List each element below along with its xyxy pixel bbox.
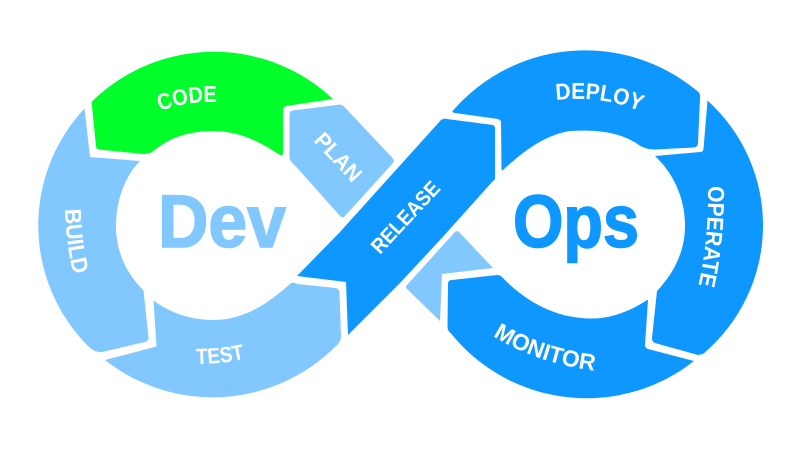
segment: plan [290, 105, 394, 217]
code arrow shape [92, 52, 333, 155]
release label: RELEASE [367, 177, 445, 258]
segment: release [297, 119, 495, 335]
segment: code [92, 52, 333, 156]
build label: BUILD [64, 210, 88, 272]
plan arrow shape [290, 105, 394, 217]
code label: CODE [158, 86, 216, 110]
arrow: monitor to release connector [406, 231, 493, 321]
monitor label: MONITOR [494, 323, 595, 371]
heading: ops: Ops [513, 180, 639, 263]
segment: build [38, 108, 149, 352]
test arrow shape [105, 283, 341, 397]
release arrow shape [297, 119, 495, 335]
segment: deploy [452, 50, 700, 170]
plan label: PLAN [309, 127, 367, 187]
monitor arrow shape [447, 275, 694, 398]
deploy label: DEPLOY [556, 83, 646, 110]
heading: dev: Dev [158, 180, 286, 263]
operate arrow shape [652, 100, 763, 355]
segment: monitor [447, 275, 694, 398]
deploy arrow shape [452, 50, 700, 170]
test label: TEST [196, 344, 242, 364]
build arrow shape [38, 108, 149, 352]
segment: operate [652, 100, 764, 355]
operate label: OPERATE [698, 187, 724, 288]
segment: test [105, 282, 341, 398]
